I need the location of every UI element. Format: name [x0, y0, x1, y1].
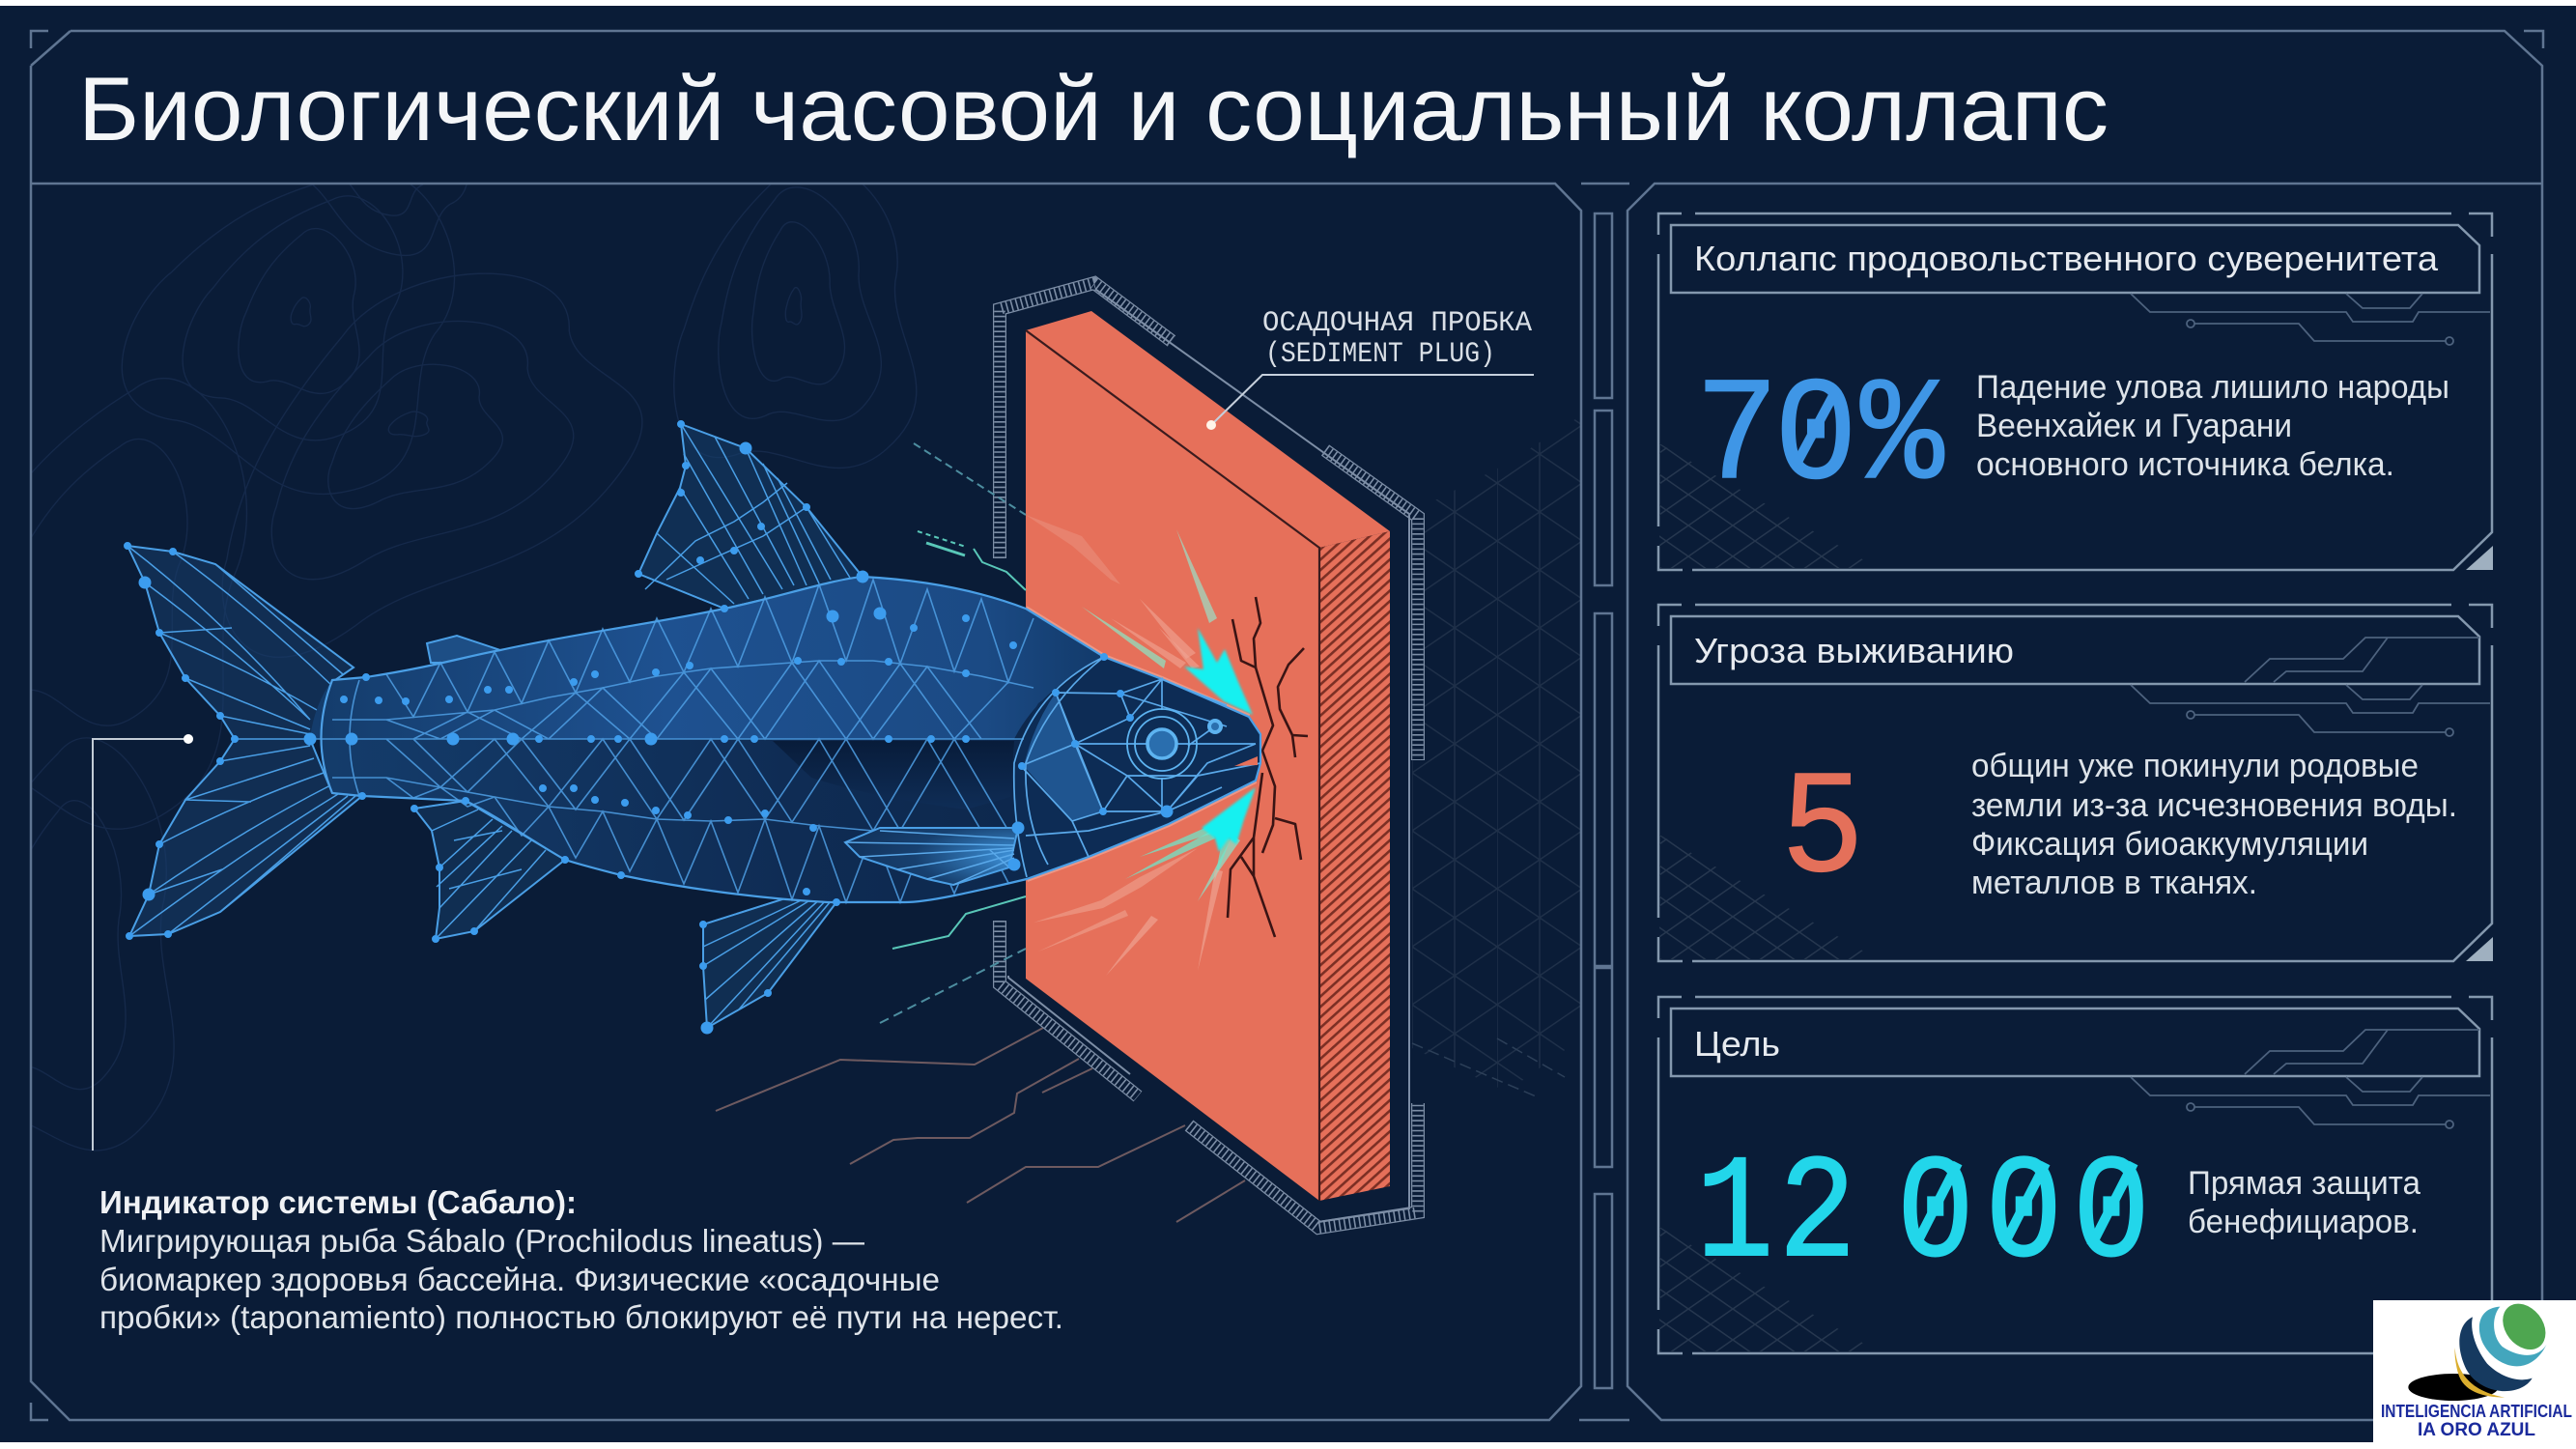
description: Падение улова лишило народы [1976, 369, 2449, 406]
caption: system indicator: биомаркер здоровья бассейна. Физические «осадочные [99, 1262, 940, 1297]
stat: 70%: 70% [1695, 355, 1945, 522]
fish nodes [127, 424, 1130, 993]
ventral fin [703, 892, 836, 1028]
description [1971, 748, 2457, 901]
tail fin [127, 546, 362, 936]
heading: Коллапс продовольственного суверенитета [1694, 239, 2439, 278]
teal dashed traces to fish [880, 443, 1026, 1023]
description: Фиксация биоаккумуляции [1971, 826, 2368, 863]
title: Биологический часовой и социальный коллапс [78, 58, 2109, 159]
caption: system indicator: Мигрирующая рыба Sábalo (Prochilodus lineatus) — [99, 1223, 864, 1259]
fish eye [1127, 709, 1221, 779]
fish callout line [93, 734, 193, 1151]
fish mouth [1234, 756, 1258, 766]
panel: threat to survival [1658, 605, 2493, 961]
plug label with leader line: (SEDIMENT PLUG) [1265, 338, 1495, 371]
body mesh [310, 580, 1033, 902]
fish: wireframe sabalo [127, 424, 1260, 1028]
impact sparks [1026, 515, 1256, 976]
stat: 5: 5 [1781, 749, 1864, 915]
heading: Цель [1694, 1024, 1780, 1064]
logo wordmark [2381, 1402, 2572, 1440]
description: Веенхайек и Гуарани [1976, 408, 2292, 444]
pectoral fin [845, 828, 1018, 885]
adipose fin [427, 636, 500, 663]
sediment plug [1026, 311, 1390, 1201]
description: металлов в тканях. [1971, 865, 2257, 901]
plug label with leader line: ОСАДОЧНАЯ ПРОБКА [1262, 307, 1532, 340]
description [1976, 369, 2449, 483]
description: бенефициаров. [2188, 1204, 2419, 1240]
description: основного источника белка. [1976, 446, 2394, 483]
bottom circuit traces behind plug [716, 1028, 1245, 1222]
stat: 12 000: 12 000 [1696, 1133, 2150, 1299]
plug label with leader line [1206, 307, 1534, 430]
body fill [310, 577, 1260, 902]
dorsal fin [638, 424, 863, 609]
heading: Угроза выживанию [1694, 631, 2014, 670]
wall cracks [1228, 597, 1308, 937]
head mesh and gill [1014, 657, 1260, 877]
panel: food sovereignty collapse [1658, 213, 2493, 570]
caption: system indicator [99, 1184, 1063, 1335]
caption: system indicator: пробки» (taponamiento) полностью блокируют её пути на нерест. [99, 1299, 1063, 1335]
logo: IA Oro Azul [2373, 1295, 2576, 1442]
logo globe emblem [2408, 1295, 2555, 1401]
description [2188, 1165, 2420, 1240]
caption: system indicator: Индикатор системы (Сабало): [99, 1184, 577, 1220]
anal fin [414, 801, 565, 939]
description: Прямая защита [2188, 1165, 2420, 1202]
description: земли из-за исчезновения воды. [1971, 787, 2457, 824]
hatched bracket frame around plug [1000, 283, 1418, 1228]
panel: goal [1658, 997, 2493, 1353]
logo wordmark: IA ORO AZUL [2418, 1420, 2535, 1440]
description: общин уже покинули родовые [1971, 748, 2419, 784]
